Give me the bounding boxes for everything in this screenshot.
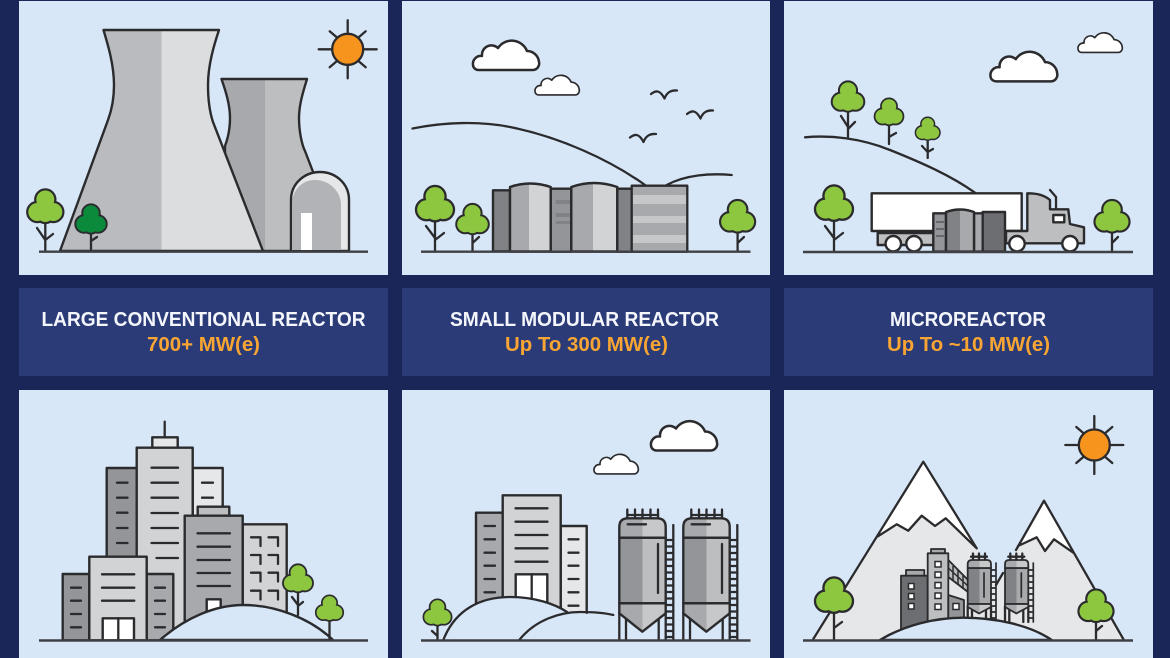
icon: hills [443, 597, 613, 640]
panel: microreactor illustration [784, 1, 1153, 275]
capacity: Up To 300 MW(e) [505, 334, 668, 356]
icon: left tree [816, 187, 852, 251]
icon: modular reactor units [493, 183, 687, 252]
icon: large cloud [990, 52, 1057, 81]
ground line [421, 250, 750, 253]
icon: light green tree [28, 190, 62, 251]
icon: small cloud [1078, 33, 1122, 52]
icon: sun [1065, 416, 1123, 474]
heading: LARGE CONVENTIONAL REACTOR [42, 309, 366, 331]
icon: left tree [816, 579, 852, 640]
icon: middle tree [457, 205, 488, 251]
icon: office buildings [476, 495, 587, 616]
capacity: Up To ~10 MW(e) [887, 334, 1050, 356]
icon: right tree [1096, 201, 1128, 251]
panel: large conventional reactor illustration [19, 1, 388, 275]
icon: small cloud [594, 454, 638, 474]
heading: SMALL MODULAR REACTOR [450, 309, 720, 331]
icon: mini plant [901, 549, 1033, 636]
icon: hill tree one [833, 82, 863, 137]
icon: containment dome [291, 172, 349, 251]
icon: rear cooling tower [222, 79, 320, 251]
icon: birds [630, 90, 713, 142]
hill outlines [412, 123, 732, 185]
capacity: 700+ MW(e) [147, 334, 260, 356]
label: microreactor [784, 288, 1153, 376]
icon: hill tree two [875, 99, 903, 144]
label: small modular reactor [402, 288, 770, 376]
icon: silo one [619, 510, 673, 640]
panel: small modular reactor illustration [402, 1, 770, 275]
hill outline [805, 137, 975, 193]
ground line [39, 639, 368, 642]
icon: right tree [721, 201, 754, 251]
icon: tree on hill [317, 596, 342, 640]
icon: right tree [1080, 590, 1112, 640]
icon: mountains [813, 462, 1123, 640]
label: large conventional reactor [19, 288, 388, 376]
icon: silo two [683, 510, 737, 640]
icon: sun [319, 20, 377, 78]
icon: left tree [417, 187, 453, 251]
icon: front cooling tower [60, 30, 263, 251]
panel: city illustration [19, 390, 388, 658]
icon: tree behind hill [284, 565, 312, 615]
icon: city buildings [63, 422, 287, 640]
heading: MICROREACTOR [890, 309, 1047, 331]
ground line [803, 639, 1133, 642]
icon: dark green tree [76, 205, 106, 251]
icon: large cloud [651, 421, 717, 451]
icon: tree [424, 600, 451, 640]
icon: hill [880, 618, 1052, 640]
icon: large cloud [473, 41, 539, 70]
icon: small cloud [535, 75, 579, 95]
icon: truck with reactor [872, 190, 1084, 252]
panel: industrial site illustration [402, 390, 770, 658]
icon: hill [160, 605, 333, 640]
ground line [421, 639, 750, 642]
icon: hill tree three [916, 118, 939, 158]
ground line [803, 251, 1133, 253]
ground line [39, 250, 368, 253]
panel: remote mountain illustration [784, 390, 1153, 658]
